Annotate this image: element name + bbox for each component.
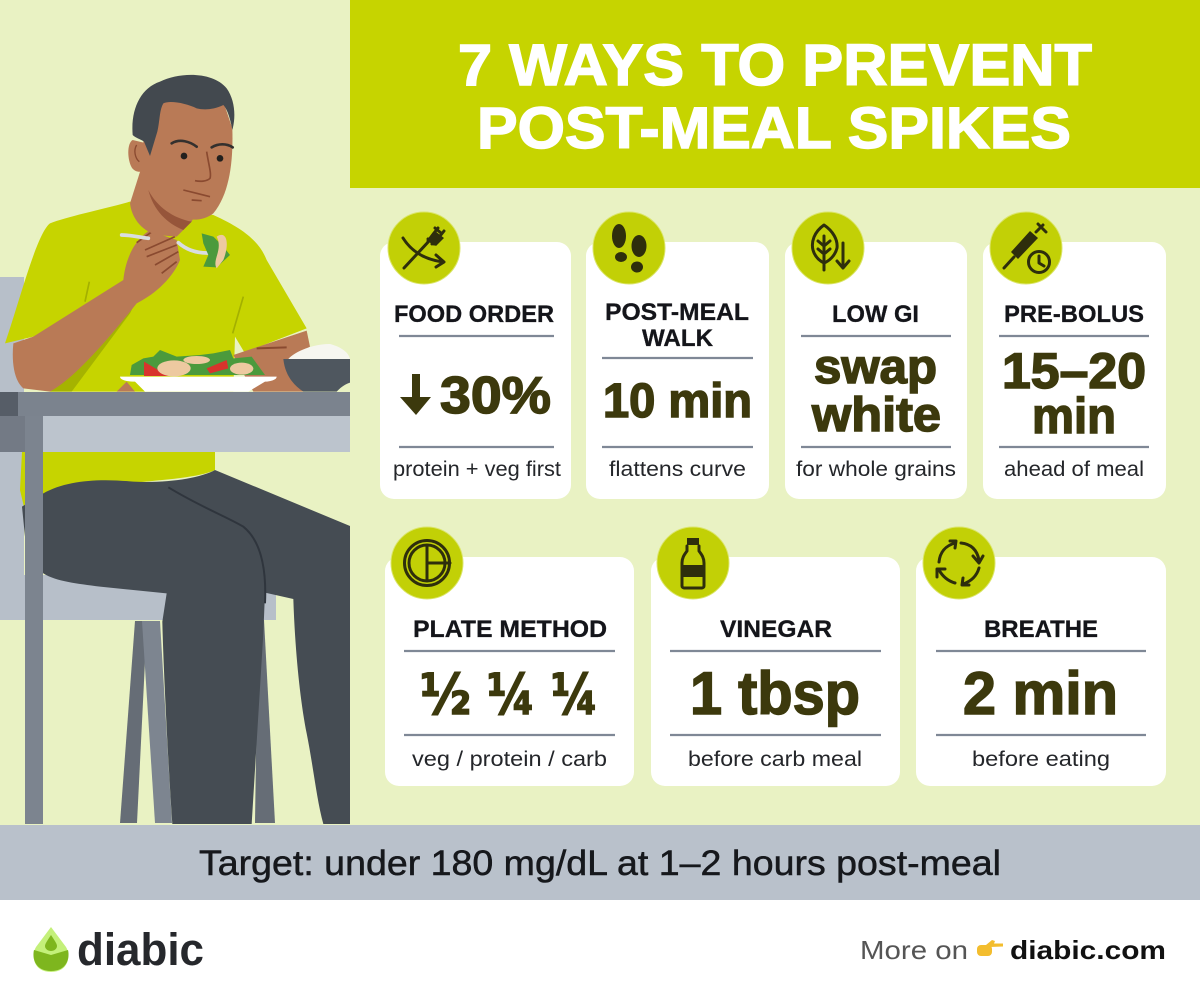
big stat: ¼ (487, 663, 535, 728)
heading: VINEGAR (720, 616, 832, 643)
caption: before carb meal (688, 748, 862, 771)
man upper body (5, 75, 350, 392)
title text: POST-MEAL SPIKES (477, 96, 1071, 161)
big stat: ¼ (551, 663, 598, 728)
rice bowl (288, 344, 350, 359)
card: pre-bolus (983, 212, 1166, 499)
icon: divided plate (391, 527, 463, 599)
heading: BREATHE (984, 616, 1098, 643)
shirt (5, 202, 307, 392)
shirt lower (20, 452, 215, 507)
ear (128, 140, 147, 172)
illustration: man eating at table (0, 75, 350, 824)
big stat: 15–20 (1002, 343, 1146, 399)
big stat: 10 min (603, 375, 752, 428)
bite of salad (202, 233, 230, 267)
icon: footprints (593, 212, 665, 284)
caption: protein + veg first (393, 458, 561, 481)
caption: for whole grains (796, 458, 956, 481)
icon: circular arrows (923, 527, 995, 599)
big stat: swap (814, 341, 937, 394)
icon: fork and arrow (388, 212, 460, 284)
chair (0, 277, 276, 823)
big stat: 1 tbsp (690, 660, 860, 727)
heading: WALK (642, 325, 714, 352)
big stat: white (811, 389, 941, 442)
title banner (350, 0, 1200, 188)
icon: bottle (657, 527, 729, 599)
caption: before eating (972, 748, 1110, 771)
target strip (0, 825, 1200, 900)
caption: flattens curve (609, 458, 746, 481)
hair (132, 75, 234, 156)
facial features (181, 153, 187, 159)
link: more on diabic.com (860, 935, 1166, 965)
link: more on diabic.com: diabic.com (1010, 935, 1166, 965)
heading: POST-MEAL (605, 299, 749, 326)
pants (22, 470, 350, 824)
logo: diabic: diabic (77, 924, 204, 975)
card: food order (380, 212, 571, 499)
table (0, 392, 350, 824)
plate (120, 377, 277, 392)
card: breathe (916, 527, 1166, 786)
card: post-meal walk (586, 212, 769, 499)
face (143, 102, 232, 220)
title text: 7 WAYS TO PREVENT (458, 33, 1092, 98)
caption: veg / protein / carb (412, 748, 607, 771)
far arm (233, 331, 310, 392)
icon: leaf and down arrow (792, 212, 864, 284)
card: low GI (785, 212, 967, 499)
heading: PLATE METHOD (413, 616, 607, 643)
heading: FOOD ORDER (394, 301, 554, 328)
big stat: 2 min (963, 660, 1118, 727)
card: plate method (385, 527, 634, 786)
caption: ahead of meal (1004, 458, 1144, 481)
near arm (13, 225, 180, 392)
link: more on diabic.com: More on (860, 935, 968, 965)
big stat (400, 367, 551, 425)
icon: syringe and clock (990, 212, 1062, 284)
heading: LOW GI (832, 301, 919, 328)
big stat: 30% (440, 367, 551, 425)
neck (130, 167, 200, 237)
target text: Target: under 180 mg/dL at 1–2 hours post-meal (199, 844, 1001, 883)
plate salad (130, 350, 265, 375)
big stat: ½ (420, 663, 471, 728)
footer (0, 900, 1200, 1000)
big stat: min (1032, 388, 1116, 444)
fork (122, 235, 213, 253)
card: vinegar (651, 527, 900, 786)
heading: PRE-BOLUS (1004, 301, 1144, 328)
